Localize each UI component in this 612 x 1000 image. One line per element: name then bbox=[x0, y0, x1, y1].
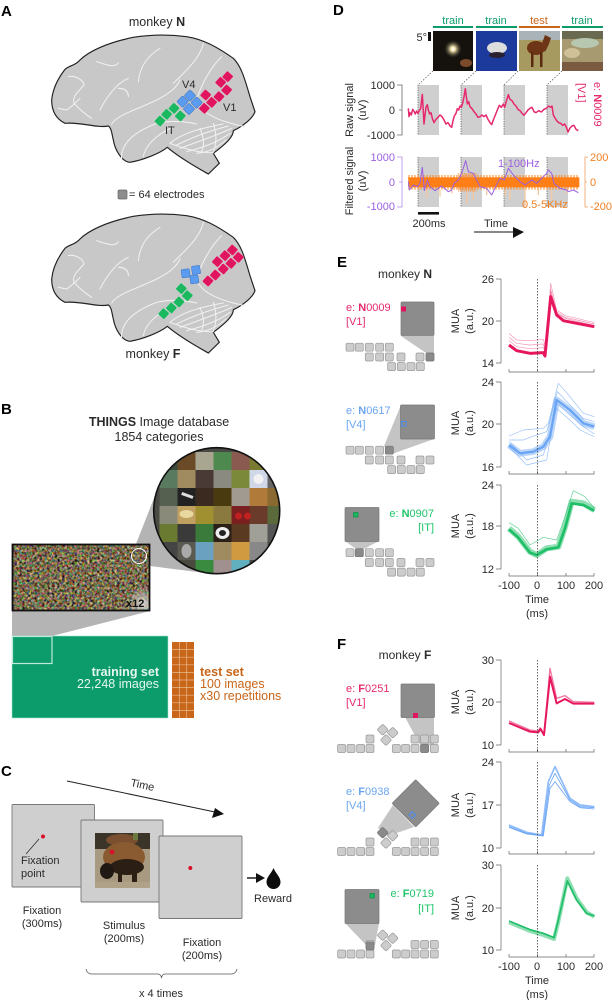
heading: monkey F: monkey F bbox=[126, 347, 181, 361]
screen: fixation 300ms: point bbox=[21, 868, 45, 880]
electrode map: N0617 V4 bbox=[346, 405, 434, 474]
stimulus windows bbox=[418, 85, 568, 207]
chart: N0009 V1: 20 bbox=[482, 316, 494, 328]
traces bbox=[509, 668, 594, 735]
chart: N0009 V1: 14 bbox=[482, 358, 494, 370]
screen: stimulus bbox=[81, 820, 163, 902]
electrode map: N0617 V4: [V4] bbox=[346, 419, 366, 431]
train test labels: train bbox=[442, 15, 464, 27]
mosaic frame and x12: x12 bbox=[126, 598, 144, 610]
brain diagram: monkey N bbox=[52, 35, 255, 174]
step labels: (200ms) bbox=[104, 933, 144, 945]
electrode map: F0719 IT: [IT] bbox=[418, 903, 434, 915]
chart: F0938 V4: 17 bbox=[482, 800, 494, 812]
x axis labels bbox=[498, 580, 603, 620]
brace bbox=[86, 969, 237, 978]
step labels: Fixation bbox=[23, 905, 61, 917]
electrode label rotated: e: N 0009 bbox=[591, 82, 603, 127]
panel letter E: E bbox=[337, 254, 347, 271]
x axis labels: 0 bbox=[534, 580, 540, 592]
chart: F0719 IT: 30 bbox=[482, 860, 494, 872]
chart: F0938 V4: MUA bbox=[450, 792, 462, 817]
chart: F0251 V1: 30 bbox=[482, 655, 494, 667]
electrode map: F0719 IT bbox=[338, 888, 438, 958]
photo: sparkler bbox=[433, 31, 473, 71]
area labels: V1 bbox=[223, 102, 236, 114]
x axis labels: (ms) bbox=[526, 608, 548, 620]
chart: F0719 IT: 20 bbox=[482, 903, 494, 915]
panel letter C: C bbox=[1, 763, 12, 780]
filtered signal axis: 0 bbox=[590, 177, 596, 189]
electrode label rotated: [V1] bbox=[575, 83, 587, 103]
x axis labels: 100 bbox=[557, 580, 575, 592]
image connectors bbox=[418, 71, 562, 85]
mosaic frame and x12 bbox=[12, 544, 150, 610]
x axis labels: -100 bbox=[498, 961, 520, 973]
panel letter D: D bbox=[333, 2, 344, 19]
chart: N0617 V4: (a.u.) bbox=[464, 410, 476, 436]
chart: N0617 V4: MUA bbox=[450, 410, 462, 435]
test set labels bbox=[200, 665, 281, 703]
time arrow: Time bbox=[484, 218, 508, 230]
repetition label: x 4 times bbox=[139, 988, 184, 1000]
x axis labels: Time bbox=[525, 594, 549, 606]
electrode arrays V1 bbox=[198, 71, 234, 114]
filtered traces bbox=[408, 161, 579, 207]
panel letter B: B bbox=[1, 401, 12, 418]
traces bbox=[509, 491, 594, 555]
chart: F0719 IT bbox=[450, 860, 594, 957]
screen: fixation 300ms bbox=[12, 804, 94, 887]
chart: N0907 IT: (a.u.) bbox=[464, 513, 476, 539]
heading: monkey N: monkey N bbox=[378, 267, 432, 281]
panel letter A: A bbox=[1, 3, 12, 20]
x axis labels: -100 bbox=[498, 580, 520, 592]
area labels: V4 bbox=[182, 79, 195, 91]
chart: N0907 IT: MUA bbox=[450, 513, 462, 538]
train test labels: test bbox=[530, 15, 548, 27]
chart: F0938 V4 bbox=[450, 757, 594, 855]
x axis labels: 200 bbox=[585, 580, 603, 592]
chart: F0719 IT: (a.u.) bbox=[464, 895, 476, 921]
chart: N0907 IT bbox=[450, 480, 594, 576]
electrode map: N0907 IT: [IT] bbox=[418, 522, 434, 534]
training set block: 22,248 images bbox=[77, 677, 159, 691]
raw signal axis: 0 bbox=[389, 105, 395, 117]
electrode map: F0938 V4 bbox=[338, 780, 439, 856]
test set labels: test set bbox=[200, 665, 245, 679]
filtered signal axis: 200 bbox=[590, 152, 608, 164]
electrode map: N0009 V1: [V1] bbox=[346, 316, 366, 328]
icon: water drop bbox=[266, 868, 280, 889]
train test labels: train bbox=[485, 15, 507, 27]
chart: N0907 IT: 12 bbox=[482, 564, 494, 576]
electrode map: F0251 V1 bbox=[338, 683, 438, 752]
magnified image circle bbox=[152, 446, 280, 574]
heading: THINGS bbox=[89, 415, 229, 444]
legend: 64 electrodes: = 64 electrodes bbox=[129, 189, 205, 201]
raw signal axis: -1000 bbox=[367, 130, 395, 142]
scale bar 200ms: 200ms bbox=[412, 218, 446, 230]
chart: N0009 V1: MUA bbox=[450, 308, 462, 333]
stimulus onset lines bbox=[418, 85, 547, 207]
chart: F0251 V1: 10 bbox=[482, 740, 494, 752]
photo: blue cloth bbox=[476, 31, 517, 71]
filtered signal axis: 0 bbox=[389, 177, 395, 189]
panel B: image database bbox=[1, 401, 286, 718]
electrode arrays IT bbox=[158, 283, 193, 320]
heading: THINGS: 1854 categories bbox=[115, 430, 203, 444]
filtered signal axis: -200 bbox=[590, 201, 612, 213]
chart: N0617 V4: 16 bbox=[482, 462, 494, 474]
traces bbox=[509, 767, 594, 836]
scale bar 200ms bbox=[412, 212, 446, 230]
electrode map: F0938 V4: e: F0938 bbox=[346, 786, 389, 798]
image mosaic bbox=[13, 545, 149, 610]
raw signal axis: 1000 bbox=[371, 80, 395, 92]
electrode label rotated bbox=[575, 82, 603, 127]
chart: F0938 V4: 10 bbox=[482, 843, 494, 855]
electrode arrays IT bbox=[154, 102, 186, 127]
area labels: IT bbox=[165, 125, 175, 137]
panel A: brains bbox=[1, 3, 255, 361]
step labels: Fixation bbox=[183, 937, 221, 949]
zoom cone to training set bbox=[12, 611, 150, 636]
bison image bbox=[95, 833, 150, 888]
electrode map: F0719 IT: e: F0719 bbox=[391, 888, 434, 900]
filtered signal axis bbox=[344, 147, 612, 215]
electrode map: N0009 V1: e: N0009 bbox=[346, 302, 391, 314]
filtered signal axis: -1000 bbox=[367, 201, 395, 213]
x axis labels bbox=[498, 961, 603, 1000]
training set block: training set bbox=[92, 665, 160, 679]
test set labels: 100 images bbox=[200, 677, 265, 691]
time arrow: Time bbox=[129, 777, 155, 794]
electrode map: N0009 V1 bbox=[346, 302, 434, 371]
electrode map: F0251 V1: [V1] bbox=[346, 697, 366, 709]
chart: N0617 V4: 24 bbox=[482, 377, 494, 389]
panel letter F: F bbox=[337, 636, 346, 653]
raw signal axis: (uV) bbox=[357, 100, 369, 120]
electrode map: N0617 V4: e: N0617 bbox=[346, 405, 391, 417]
electrode map: N0907 IT bbox=[345, 508, 434, 576]
train test labels bbox=[433, 15, 603, 28]
chart: F0251 V1: MUA bbox=[450, 689, 462, 714]
chart: F0251 V1: 20 bbox=[482, 697, 494, 709]
train test labels: train bbox=[571, 15, 593, 27]
filtered signal axis: 1000 bbox=[371, 152, 395, 164]
electrode map: N0907 IT: e: N0907 bbox=[389, 508, 434, 520]
electrode map: F0251 V1: e: F0251 bbox=[346, 683, 389, 695]
traces bbox=[509, 383, 594, 465]
screen: fixation 300ms: Fixation bbox=[21, 855, 60, 867]
panel F bbox=[337, 636, 603, 1000]
traces bbox=[509, 283, 594, 356]
heading: THINGS: THINGS Image database bbox=[89, 415, 229, 429]
band labels: 1-100Hz bbox=[498, 158, 540, 170]
chart: F0938 V4: (a.u.) bbox=[464, 792, 476, 818]
electrode arrays V1 bbox=[202, 244, 244, 287]
raw signal trace bbox=[408, 89, 578, 132]
x axis labels: 200 bbox=[585, 961, 603, 973]
heading: monkey N: monkey N bbox=[129, 15, 185, 29]
photo: food bbox=[562, 31, 603, 71]
zoom cone to circle bbox=[136, 488, 205, 573]
raw signal axis bbox=[344, 80, 402, 142]
chart: N0907 IT: 24 bbox=[482, 480, 494, 492]
step labels: (300ms) bbox=[22, 918, 62, 930]
traces bbox=[509, 878, 594, 939]
filtered signal axis: Filtered signal bbox=[344, 147, 356, 215]
training set block bbox=[12, 636, 168, 718]
band labels: 0.5-5KHz bbox=[522, 199, 568, 211]
chart: F0719 IT: 10 bbox=[482, 945, 494, 957]
heading: monkey F: monkey F bbox=[379, 648, 431, 662]
low frequency trace bbox=[408, 161, 578, 195]
x axis labels: 100 bbox=[557, 961, 575, 973]
time arrow bbox=[67, 777, 224, 818]
panel C: task bbox=[1, 763, 292, 1000]
x axis labels: Time bbox=[525, 975, 549, 987]
electrode arrays V4 bbox=[181, 265, 201, 284]
step labels: Stimulus bbox=[103, 920, 146, 932]
step labels bbox=[22, 905, 222, 962]
chart: N0907 IT: 18 bbox=[482, 521, 494, 533]
chart: F0719 IT: MUA bbox=[450, 895, 462, 920]
area labels bbox=[165, 79, 236, 137]
photo: horse bbox=[519, 31, 560, 71]
scale 5 degrees: 5° bbox=[416, 32, 427, 44]
chart: N0009 V1: 26 bbox=[482, 274, 494, 286]
chart: N0009 V1: (a.u.) bbox=[464, 308, 476, 334]
test set labels: x30 repetitions bbox=[200, 689, 281, 703]
panel E bbox=[337, 254, 603, 620]
chart: N0617 V4: 20 bbox=[482, 419, 494, 431]
reward arrow bbox=[247, 873, 265, 883]
chart: N0009 V1 bbox=[450, 274, 594, 372]
electrode map: F0938 V4: [V4] bbox=[346, 800, 366, 812]
high frequency band bbox=[408, 177, 579, 207]
filtered signal axis: (uV) bbox=[357, 171, 369, 191]
x axis labels: 0 bbox=[534, 961, 540, 973]
test set grid bbox=[172, 642, 194, 718]
chart: F0938 V4: 24 bbox=[482, 757, 494, 769]
step labels: (200ms) bbox=[182, 950, 222, 962]
chart: F0251 V1 bbox=[450, 655, 594, 752]
reward label: Reward bbox=[254, 893, 292, 905]
chart: N0617 V4 bbox=[450, 377, 594, 474]
brain diagram: monkey F bbox=[52, 214, 255, 353]
band labels bbox=[498, 158, 568, 211]
raw signal axis: Raw signal bbox=[344, 83, 356, 137]
time arrow bbox=[474, 218, 524, 238]
panel D: signals bbox=[333, 2, 612, 238]
screen: fixation 200ms bbox=[159, 836, 242, 918]
electrode arrays V4 bbox=[177, 90, 203, 115]
chart: F0251 V1: (a.u.) bbox=[464, 689, 476, 715]
